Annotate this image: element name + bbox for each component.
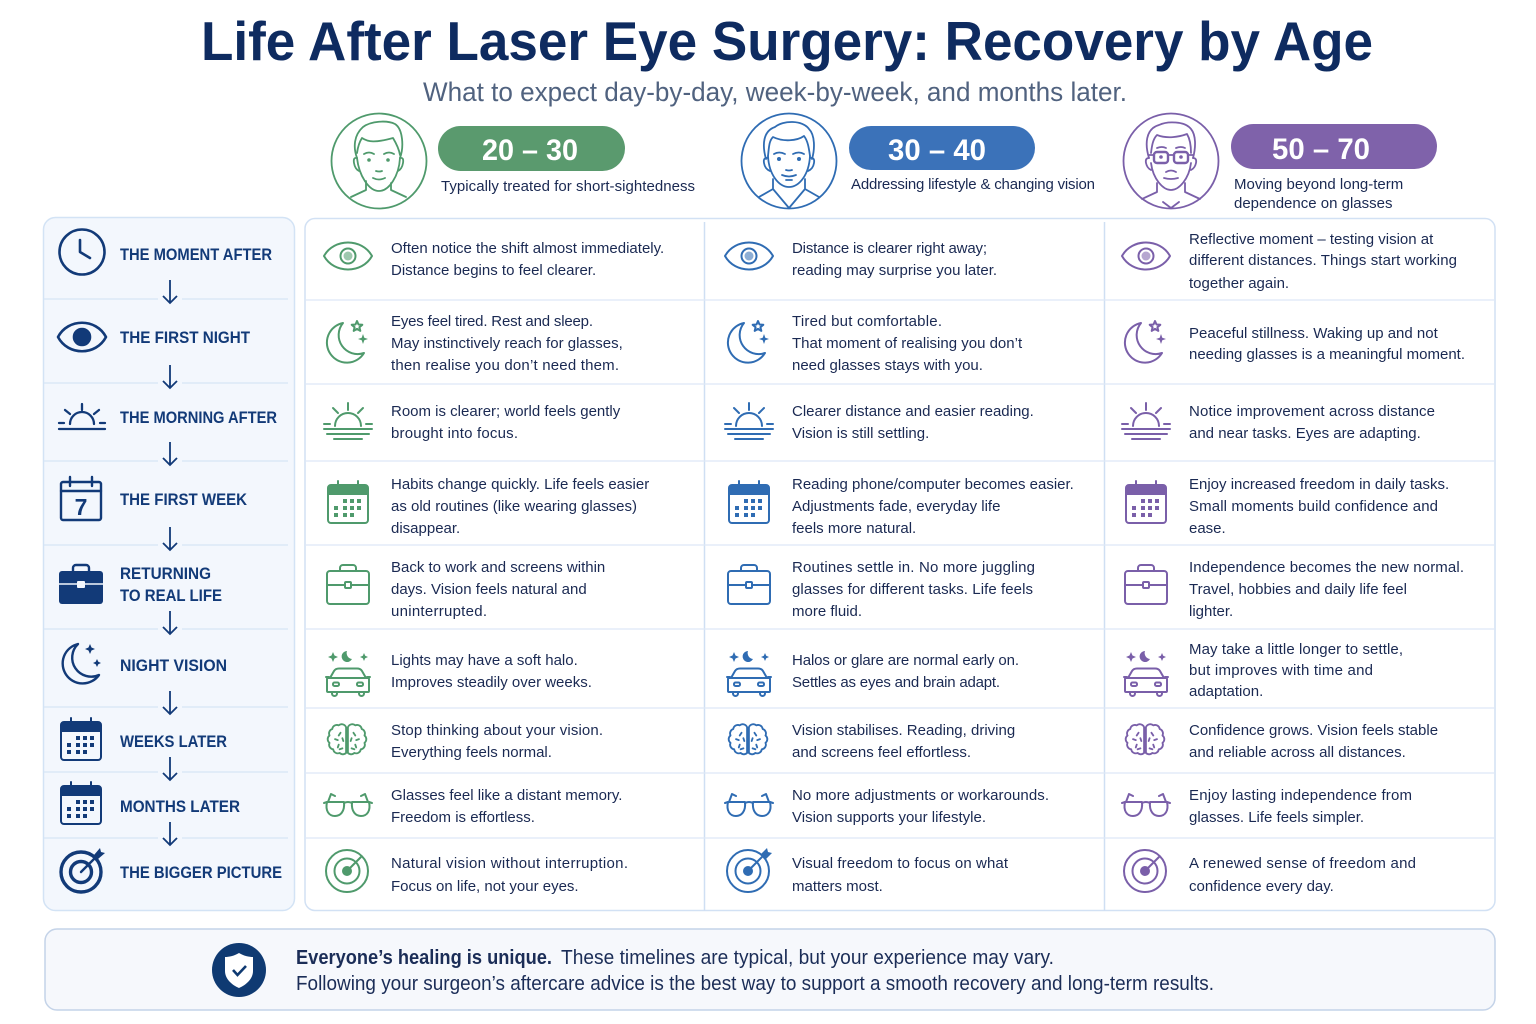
callout text: These timelines are typical, but your experience may vary. — [561, 947, 1054, 969]
callout text: Everyone’s healing is unique. — [296, 947, 552, 969]
row: returning to real life, age 20-30: uninterrupted. — [391, 603, 487, 620]
row: the morning after, age 20-30: Room is clearer; world feels gently — [391, 403, 621, 420]
age pill 30-40 — [849, 126, 1035, 170]
portrait: young man — [332, 114, 426, 208]
row: returning to real life, age 30-40: Routines settle in. No more juggling — [792, 559, 1035, 576]
age pill 20-30: 20 – 30 — [482, 134, 578, 167]
row: weeks later, age 20-30 — [328, 722, 603, 761]
stage: the first night — [58, 323, 250, 351]
row: weeks later, age 20-30: Everything feels normal. — [391, 744, 552, 761]
row: the morning after, age 30-40: Clearer distance and easier reading. — [792, 403, 1034, 420]
column header: age 50-70 — [1124, 114, 1437, 212]
row: the morning after, age 50-70: and near tasks. Eyes are adapting. — [1189, 425, 1421, 442]
row: the moment after, age 50-70: Reflective moment – testing vision at — [1189, 231, 1433, 248]
stage: the bigger picture: THE BIGGER PICTURE — [120, 864, 282, 882]
row: weeks later, age 20-30: Stop thinking about your vision. — [391, 722, 603, 739]
row: returning to real life, age 50-70 — [1125, 559, 1464, 620]
title: Life After Laser Eye Surgery: Recovery by Age — [201, 10, 1373, 72]
row: night vision, age 30-40: Halos or glare are normal early on. — [792, 652, 1019, 669]
arrow — [163, 280, 177, 303]
row: the first night, age 30-40: Tired but comfortable. — [792, 313, 942, 330]
stage: night vision — [63, 644, 227, 683]
row: months later, age 20-30: Freedom is effortless. — [391, 809, 535, 826]
row: months later, age 30-40: No more adjustments or workarounds. — [792, 787, 1049, 804]
row: the first week, age 50-70: Enjoy increased freedom in daily tasks. — [1189, 476, 1449, 493]
row: months later, age 30-40: Vision supports your lifestyle. — [792, 809, 986, 826]
age pill 50-70: 50 – 70 — [1272, 133, 1370, 166]
row: the moment after, age 20-30 — [324, 240, 664, 279]
row: the first night, age 30-40: That moment of realising you don’t — [792, 335, 1023, 352]
row: the first night, age 50-70: needing glasses is a meaningful moment. — [1189, 346, 1465, 363]
arrow — [163, 822, 177, 845]
row: the moment after, age 30-40: Distance is clearer right away; — [792, 240, 987, 257]
row: the bigger picture, age 20-30 — [326, 850, 628, 895]
row: the bigger picture, age 50-70: confidence every day. — [1189, 878, 1334, 895]
stage: weeks later: WEEKS LATER — [120, 733, 227, 751]
age pill 50-70 — [1231, 124, 1437, 169]
row: the first night, age 30-40: need glasses stays with you. — [792, 357, 983, 374]
row: the first week, age 30-40: Reading phone/computer becomes easier. — [792, 476, 1074, 493]
arrow — [163, 365, 177, 388]
row: night vision, age 30-40: Settles as eyes and brain adapt. — [792, 674, 1000, 691]
row: returning to real life, age 30-40: glasses for different tasks. Life feels — [792, 581, 1033, 598]
callout text — [296, 947, 1214, 995]
row: the first week, age 50-70: ease. — [1189, 520, 1226, 537]
stage: the morning after — [59, 404, 277, 429]
stage: returning to real life: RETURNING — [120, 565, 211, 583]
row: the first night, age 20-30: Eyes feel tired. Rest and sleep. — [391, 313, 593, 330]
stage: weeks later — [61, 718, 227, 760]
row: returning to real life, age 50-70: Travel, hobbies and daily life feel — [1189, 581, 1407, 598]
row: the moment after, age 50-70: together again. — [1189, 275, 1289, 292]
row: the morning after, age 30-40 — [725, 403, 1034, 442]
arrow — [163, 611, 177, 634]
panel: timeline stages — [44, 218, 294, 910]
stage: the first week: THE FIRST WEEK — [120, 491, 247, 509]
row: weeks later, age 50-70: and reliable across all distances. — [1189, 744, 1406, 761]
stage: the first night: THE FIRST NIGHT — [120, 329, 250, 347]
row: the morning after, age 20-30: brought into focus. — [391, 425, 518, 442]
subtitle: What to expect day-by-day, week-by-week, and months later. — [423, 77, 1127, 107]
stage: the moment after — [60, 230, 272, 274]
row: the first week, age 20-30: Habits change quickly. Life feels easier — [391, 476, 649, 493]
arrow — [163, 691, 177, 714]
callout text: Following your surgeon’s aftercare advice is the best way to support a smooth recovery and long-term results. — [296, 973, 1214, 995]
row: the bigger picture, age 20-30: Natural vision without interruption. — [391, 855, 628, 872]
row: the morning after, age 20-30 — [324, 403, 621, 442]
arrow — [163, 442, 177, 465]
arrow — [163, 757, 177, 780]
row: the morning after, age 30-40: Vision is still settling. — [792, 425, 929, 442]
callout: healing note — [45, 929, 1495, 1010]
row: the moment after, age 30-40 — [725, 240, 997, 279]
row: the morning after, age 50-70: Notice improvement across distance — [1189, 403, 1435, 420]
row: the first night, age 20-30: May instinctively reach for glasses, — [391, 335, 623, 352]
row: months later, age 50-70: Enjoy lasting independence from — [1189, 787, 1412, 804]
row: the first week, age 20-30 — [328, 476, 649, 537]
row: the bigger picture, age 50-70 — [1124, 850, 1416, 895]
row: months later, age 50-70: glasses. Life feels simpler. — [1189, 809, 1364, 826]
age description 30-40: Addressing lifestyle & changing vision — [851, 176, 1095, 193]
row: the first week, age 50-70 — [1126, 476, 1449, 537]
row: the first week, age 30-40: feels more natural. — [792, 520, 916, 537]
portrait: middle-aged man — [742, 114, 836, 208]
row: night vision, age 50-70: but improves with time and — [1189, 662, 1373, 679]
row: weeks later, age 50-70: Confidence grows. Vision feels stable — [1189, 722, 1438, 739]
stage: the morning after: THE MORNING AFTER — [120, 409, 277, 427]
row: months later, age 30-40 — [725, 787, 1049, 826]
row: night vision, age 20-30 — [326, 651, 592, 696]
stage: the first week — [61, 477, 247, 520]
row: weeks later, age 30-40 — [729, 722, 1015, 761]
row: weeks later, age 30-40: Vision stabilises. Reading, driving — [792, 722, 1015, 739]
row: the moment after, age 30-40: reading may surprise you later. — [792, 262, 997, 279]
row: the first night, age 30-40 — [728, 313, 1023, 374]
row: the first night, age 20-30 — [327, 313, 623, 374]
portrait: older man with glasses — [1124, 114, 1218, 208]
stage: returning to real life — [59, 565, 222, 605]
row: the first night, age 20-30: then realise you don’t need them. — [391, 357, 619, 374]
age description 20-30: Typically treated for short-sightedness — [441, 178, 695, 195]
column header: age 20-30 — [332, 114, 695, 208]
row: night vision, age 30-40 — [727, 651, 1019, 696]
row: returning to real life, age 30-40: more fluid. — [792, 603, 862, 620]
row: returning to real life, age 50-70: Independence becomes the new normal. — [1189, 559, 1464, 576]
row: returning to real life, age 30-40 — [728, 559, 1035, 620]
age pill 30-40: 30 – 40 — [888, 134, 986, 167]
row: the bigger picture, age 30-40: matters most. — [792, 878, 883, 895]
row: the first week, age 30-40: Adjustments fade, everyday life — [792, 498, 1000, 515]
arrow — [163, 527, 177, 550]
row: night vision, age 50-70: May take a little longer to settle, — [1189, 641, 1403, 658]
row: the first week, age 30-40 — [729, 476, 1074, 537]
row: the first week, age 20-30: as old routines (like wearing glasses) — [391, 498, 637, 515]
row: the bigger picture, age 50-70: A renewed sense of freedom and — [1189, 855, 1416, 872]
row: the moment after, age 20-30: Distance begins to feel clearer. — [391, 262, 596, 279]
stage: the first week: 7 — [75, 494, 87, 520]
row: night vision, age 50-70: adaptation. — [1189, 683, 1263, 700]
age description 50-70: dependence on glasses — [1234, 195, 1392, 212]
stage: the moment after: THE MOMENT AFTER — [120, 246, 272, 264]
row: the morning after, age 50-70 — [1122, 403, 1435, 442]
row: the first week, age 50-70: Small moments build confidence and — [1189, 498, 1438, 515]
row: months later, age 20-30: Glasses feel like a distant memory. — [391, 787, 622, 804]
row: night vision, age 50-70 — [1124, 641, 1403, 700]
row: returning to real life, age 20-30: Back to work and screens within — [391, 559, 605, 576]
row: weeks later, age 30-40: and screens feel effortless. — [792, 744, 971, 761]
row: night vision, age 20-30: Improves steadily over weeks. — [391, 674, 592, 691]
row: the bigger picture, age 20-30: Focus on life, not your eyes. — [391, 878, 579, 895]
row: the bigger picture, age 30-40 — [727, 848, 1009, 895]
row: months later, age 20-30 — [324, 787, 622, 826]
row: the first night, age 50-70: Peaceful stillness. Waking up and not — [1189, 325, 1438, 342]
stage: returning to real life: TO REAL LIFE — [120, 587, 222, 605]
row: the moment after, age 50-70 — [1122, 231, 1457, 292]
row: months later, age 50-70 — [1122, 787, 1412, 826]
panel: recovery table — [305, 218, 1495, 911]
row: night vision, age 20-30: Lights may have a soft halo. — [391, 652, 578, 669]
icon: shield — [212, 943, 266, 997]
row: the first week, age 20-30: disappear. — [391, 520, 460, 537]
row: the moment after, age 20-30: Often notice the shift almost immediately. — [391, 240, 664, 257]
age description 50-70: Moving beyond long-term — [1234, 176, 1403, 193]
row: weeks later, age 50-70 — [1126, 722, 1438, 761]
stage: months later: MONTHS LATER — [120, 798, 240, 816]
row: returning to real life, age 20-30: days. Vision feels natural and — [391, 581, 587, 598]
column header: age 30-40 — [742, 114, 1095, 208]
row: returning to real life, age 50-70: lighter. — [1189, 603, 1233, 620]
row: the moment after, age 50-70: different distances. Things start working — [1189, 252, 1457, 269]
stage: night vision: NIGHT VISION — [120, 657, 227, 675]
stage: the bigger picture — [61, 848, 282, 892]
row: returning to real life, age 20-30 — [327, 559, 605, 620]
stage: months later — [61, 782, 240, 824]
row: the bigger picture, age 30-40: Visual freedom to focus on what — [792, 855, 1009, 872]
age pill 20-30 — [438, 126, 625, 171]
row: the first night, age 50-70 — [1125, 321, 1465, 363]
